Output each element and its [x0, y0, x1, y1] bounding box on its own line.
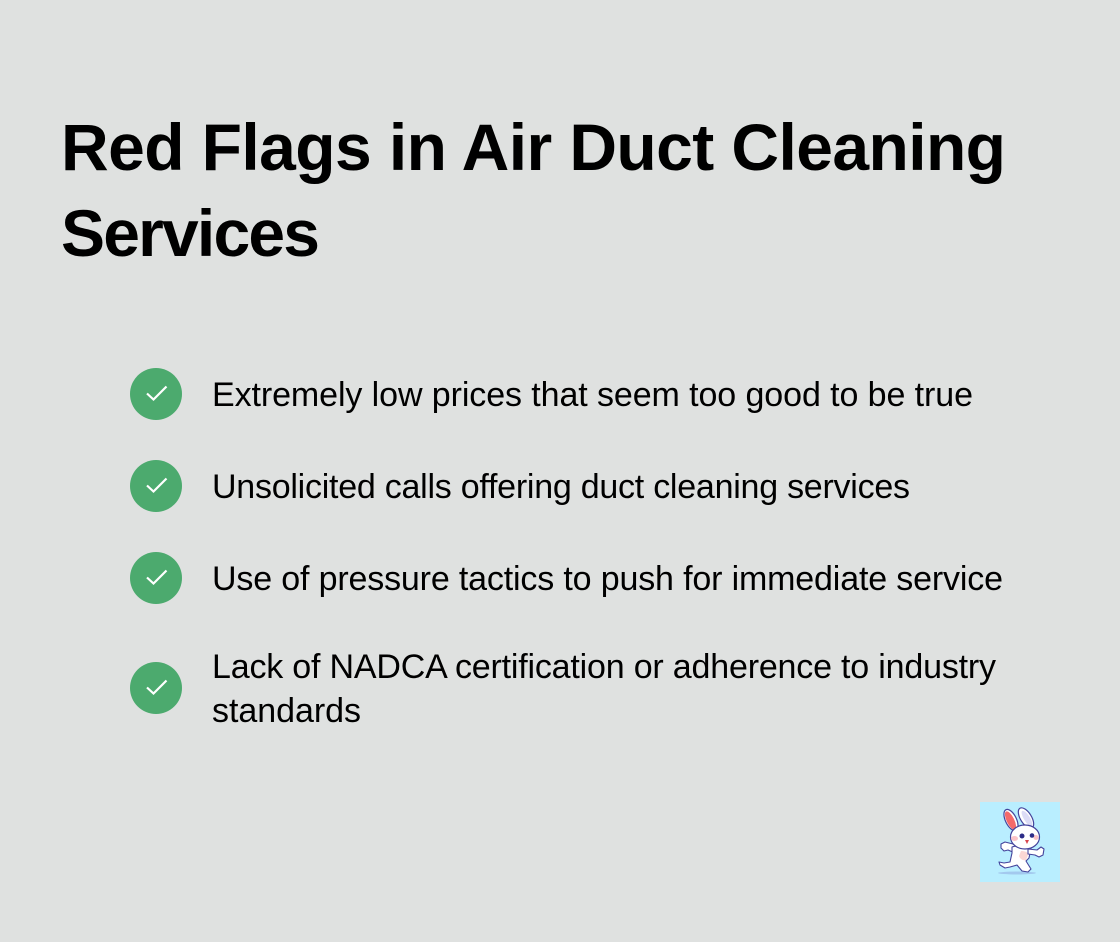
item 4: standards — [212, 692, 361, 730]
item 2: Unsolicited calls offering duct cleaning services — [212, 468, 910, 506]
item 4 — [130, 648, 996, 730]
item 4: Lack of NADCA certification or adherence to industry — [212, 648, 996, 686]
title: Red Flags in Air Duct Cleaning — [61, 110, 1006, 184]
item 1 — [130, 368, 973, 420]
icon: rabbit logo — [980, 802, 1060, 882]
item 3 — [130, 552, 1003, 604]
title — [61, 110, 1006, 270]
title: Services — [61, 196, 320, 270]
item 2 — [130, 460, 910, 512]
item 3: Use of pressure tactics to push for immediate service — [212, 560, 1003, 598]
checklist — [130, 368, 1003, 730]
item 1: Extremely low prices that seem too good to be true — [212, 376, 973, 414]
